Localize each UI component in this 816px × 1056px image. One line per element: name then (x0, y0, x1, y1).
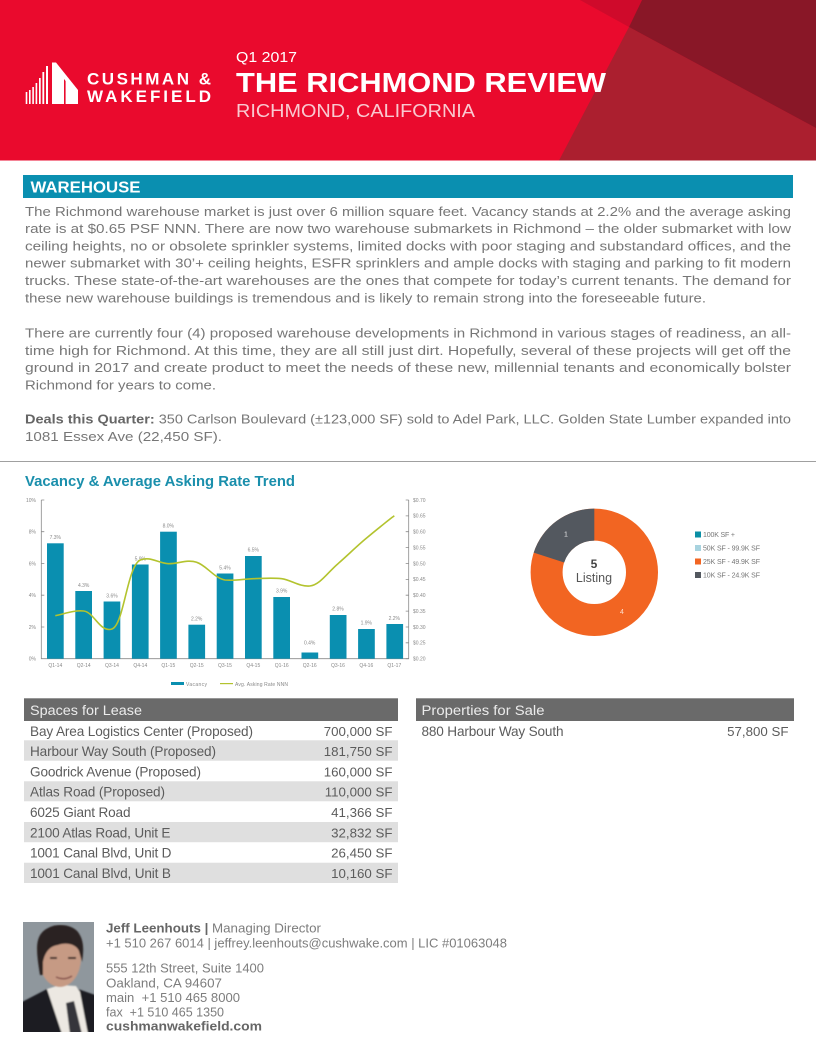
lease rows: Goodrick Avenue (Proposed) (30, 764, 201, 780)
x axis labels: Q1-16 (275, 663, 289, 669)
lease rows: Bay Area Logistics Center (Proposed) (30, 724, 253, 739)
header banner (0, 0, 816, 160)
text block: deals this quarter (25, 412, 791, 444)
logo wordmark: CUSHMAN & (87, 70, 211, 88)
x axis labels: Q1-15 (161, 663, 175, 669)
logo wordmark (87, 70, 211, 106)
table header (416, 698, 794, 721)
bar value labels: 8.0% (163, 524, 175, 530)
right axis labels: $0.60 (413, 530, 426, 536)
lease rows: Atlas Road (Proposed) (30, 784, 165, 800)
lease rows: 1001 Canal Blvd, Unit B (30, 866, 171, 881)
photo: Jeff Leenhouts (18, 918, 98, 1036)
lease rows: 6025 Giant Road (30, 805, 130, 820)
orange wedge count: 4 (620, 609, 624, 616)
right axis labels: $0.40 (413, 593, 426, 599)
donut legend: 10K SF - 24.9K SF (703, 572, 760, 580)
left axis labels: 4% (29, 593, 37, 599)
contact details (106, 922, 507, 1034)
lease rows: 2100 Atlas Road, Unit E (30, 826, 170, 840)
x axis labels: Q3-14 (105, 663, 119, 669)
report title: THE RICHMOND REVIEW (236, 67, 607, 98)
office address and numbers (106, 962, 264, 1020)
text block: market overview: rate is at $0.65 PSF NNN. There are now two warehouse submarkets in Richmond – the older submarket with low (25, 221, 792, 236)
chart legend: Avg. Asking Rate NNN (235, 682, 288, 688)
lease rows: 160,000 SF (324, 764, 392, 780)
lease rows (30, 724, 392, 881)
text block: market overview: trucks. These state-of-the-art warehouses are the ones that compete for today’s current tenants. The demand for (25, 273, 792, 288)
donut chart: listings by size (534, 509, 642, 620)
donut centre label: Listing (576, 571, 612, 585)
left axis labels: 8% (29, 530, 37, 536)
lease rows: 181,750 SF (324, 744, 392, 759)
table: spaces for lease: Spaces for Lease (30, 703, 142, 718)
donut legend: 25K SF - 49.9K SF (703, 559, 760, 566)
sale row: 880 Harbour Way South (422, 724, 564, 739)
text block: deals this quarter: 1081 Essex Ave (22,450 SF). (25, 429, 222, 444)
bar value labels: 3.6% (106, 594, 118, 600)
text block: market overview: newer submarket with 30’+ ceiling heights, ESFR sprinklers and ample docks with staging and parking to fit modern (25, 256, 791, 271)
right axis labels: $0.35 (413, 609, 426, 615)
table: properties for sale: 57,800 SF (727, 724, 788, 739)
right axis labels: $0.20 (413, 656, 426, 662)
bar value labels: 2.8% (332, 606, 344, 612)
right axis labels (413, 498, 426, 662)
section heading: warehouse (23, 175, 793, 198)
logo wordmark: WAKEFIELD (87, 87, 211, 106)
bar value labels: 5.9% (135, 556, 147, 562)
table: spaces for lease (24, 698, 398, 883)
bar value labels: 4.3% (78, 583, 90, 589)
left axis labels: 2% (29, 625, 37, 631)
text block: proposed developments: There are currently four (4) proposed warehouse developments in Richmond in various stages of readiness, an all- (25, 326, 791, 340)
lease rows: 110,000 SF (325, 784, 392, 800)
x axis labels: Q2-14 (77, 663, 91, 669)
x axis labels: Q3-15 (218, 663, 232, 669)
lease rows: 32,832 SF (331, 826, 392, 840)
office address and numbers: Oakland, CA 94607 (106, 976, 222, 990)
x axis labels: Q4-15 (246, 663, 260, 669)
text block: market overview: ceiling heights, no or obsolete sprinkler systems, limited docks with poor staging and substandard offices, and the (25, 238, 791, 254)
x axis labels: Q2-16 (303, 663, 317, 669)
bar value labels: 6.5% (248, 548, 260, 554)
bar value labels (50, 524, 401, 646)
lease rows: 700,000 SF (324, 724, 392, 739)
left axis labels (26, 498, 37, 662)
left axis labels: 10% (26, 498, 37, 504)
section heading: warehouse: WAREHOUSE (30, 180, 140, 196)
report quarter: Q1 2017 (236, 49, 297, 66)
bar value labels: 2.2% (389, 616, 401, 622)
text block: market overview: these new warehouse buildings is tremendous and is likely to remain strong into the foreseeable future. (25, 290, 706, 305)
right axis labels: $0.55 (413, 545, 426, 551)
office address and numbers: 555 12th Street, Suite 1400 (106, 962, 264, 976)
right axis labels: $0.65 (413, 514, 426, 520)
website: cushmanwakefield.com (106, 1020, 262, 1034)
right axis labels: $0.70 (413, 498, 426, 504)
table: properties for sale: Properties for Sale (422, 703, 544, 718)
text block: market overview (25, 204, 792, 305)
bar value labels: 0.4% (304, 640, 316, 646)
right axis labels: $0.30 (413, 625, 426, 631)
donut legend: 50K SF - 99.9K SF (703, 546, 760, 552)
left axis labels: 0% (29, 656, 37, 662)
lease rows: 10,160 SF (331, 866, 392, 881)
lease rows: 26,450 SF (331, 846, 392, 860)
x axis labels: Q1-17 (387, 663, 401, 669)
dark wedge count: 1 (564, 532, 568, 538)
bar value labels: 3.9% (276, 588, 288, 594)
office address and numbers: fax +1 510 465 1350 (106, 1006, 224, 1020)
text block: market overview: The Richmond warehouse market is just over 6 million square feet. Vacancy stands at 2.2% and the average asking (25, 204, 791, 219)
x axis labels: Q4-14 (133, 663, 147, 669)
report location: RICHMOND, CALIFORNIA (236, 101, 475, 121)
left axis labels: 6% (29, 562, 37, 568)
right axis labels: $0.25 (413, 641, 426, 647)
vacancy bars (47, 532, 403, 659)
donut legend (695, 532, 760, 580)
chart legend: Vacancy (186, 682, 208, 688)
donut legend: 100K SF + (703, 532, 735, 539)
x axis labels: Q4-16 (359, 663, 373, 669)
bar value labels: 5.4% (219, 566, 231, 572)
asking rate line (55, 516, 394, 630)
lease rows: 41,366 SF (331, 805, 392, 820)
bar value labels: 2.2% (191, 616, 203, 622)
table header (24, 698, 398, 721)
x axis labels: Q3-16 (331, 663, 345, 669)
x axis labels: Q2-15 (190, 663, 204, 669)
phone email licence: +1 510 267 6014 | jeffrey.leenhouts@cushwake.com | LIC #01063048 (106, 936, 507, 950)
table: properties for sale (416, 698, 794, 739)
x axis labels (48, 663, 401, 669)
lease rows: Harbour Way South (Proposed) (30, 744, 216, 759)
bar and line chart: vacancy and asking rate (26, 498, 426, 688)
axes (41, 500, 409, 659)
name and title: Jeff Leenhouts | Managing Director (106, 922, 321, 936)
text block: proposed developments (25, 326, 792, 392)
text block: proposed developments: Richmond for years to come. (25, 377, 216, 392)
bar value labels: 7.3% (50, 535, 62, 541)
logo mark (26, 62, 78, 104)
right axis labels: $0.45 (413, 577, 426, 583)
chart legend (171, 682, 288, 688)
donut centre total: 5 (591, 557, 598, 571)
lease rows: 1001 Canal Blvd, Unit D (30, 846, 172, 860)
office address and numbers: main +1 510 465 8000 (106, 991, 240, 1005)
text block: deals this quarter: Deals this Quarter: 350 Carlson Boulevard (±123,000 SF) sold to Adel Park, LLC. Golden State Lumber expanded into (25, 412, 791, 427)
right axis labels: $0.50 (413, 561, 426, 567)
text block: proposed developments: ground in 2017 and create product to meet the needs of these new, millennial tenants and economically bolster (25, 360, 792, 375)
x axis labels: Q1-14 (48, 663, 62, 669)
bar value labels: 1.9% (361, 620, 373, 626)
text block: proposed developments: time high for Richmond. At this time, they are all still just dirt. Hopefully, several of these projects will get off the (25, 343, 791, 358)
row stripes (24, 740, 398, 883)
chart heading: Vacancy & Average Asking Rate Trend (25, 474, 295, 490)
